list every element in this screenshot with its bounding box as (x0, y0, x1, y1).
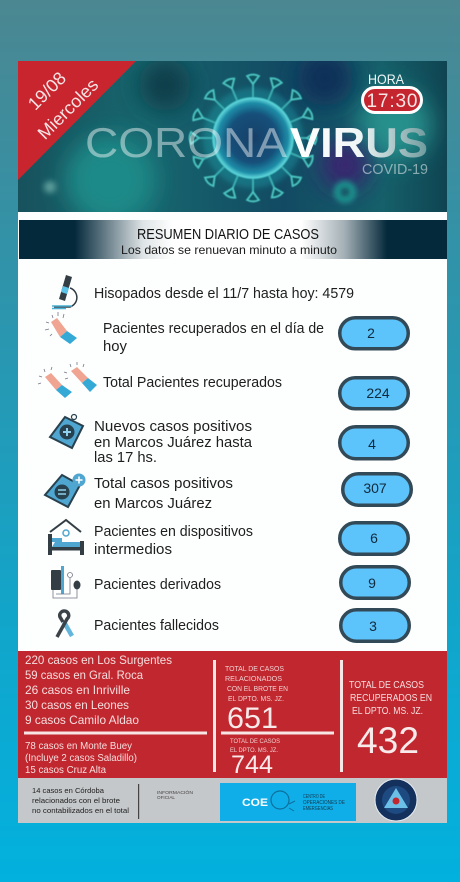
value pill: 307 (363, 480, 387, 496)
stat: total recuperados: RECUPERADOS EN (350, 693, 432, 704)
footnote: no contabilizados en el total (32, 806, 129, 815)
value pill: 224 (366, 385, 390, 401)
row: recuperados hoy (45, 312, 408, 355)
row: nuevos casos: Nuevos casos positivos (94, 419, 252, 435)
case list by town: 26 casos en Inriville (25, 683, 130, 697)
stat: total de casos: TOTAL DE CASOS (230, 738, 281, 745)
panel: grey footer (18, 778, 447, 823)
stat: casos relacionados con el brote: EL DPTO. MS. JZ. (228, 696, 284, 703)
date ribbon: 19/08 (24, 68, 70, 114)
heading band (19, 220, 447, 259)
value pill: 4 (368, 436, 376, 452)
icon: two clapping hands (38, 362, 97, 398)
value pill (340, 318, 408, 349)
logo: COE: COE (242, 797, 268, 809)
icon: mourning ribbon (57, 611, 72, 637)
value pill: 9 (368, 575, 376, 591)
panel: header banner (18, 61, 447, 212)
row: nuevos casos (50, 414, 408, 466)
stat: total recuperados: EL DPTO. MS. JZ. (352, 706, 423, 717)
title: VIRUS: VIRUS (290, 119, 428, 166)
stat: total recuperados (349, 680, 432, 761)
row: dispositivos intermedios: Pacientes en dispositivos (94, 524, 253, 540)
panel: red totals (18, 651, 447, 779)
panel: white card (18, 212, 447, 652)
case list by town (25, 653, 172, 727)
icon: clipboard minus plus (45, 474, 86, 507)
logo: COE (220, 783, 356, 821)
row: nuevos casos: las 17 hs. (94, 450, 157, 466)
official info label (157, 789, 193, 800)
official info label: INFORMACIÓN (157, 789, 193, 795)
logo: COE: EMERGENCIAS (303, 806, 334, 812)
row: total positivos: en Marcos Juárez (94, 496, 212, 512)
value pill (341, 567, 409, 598)
logo: COE: OPERACIONES DE (303, 800, 346, 806)
row: total positivos: Total casos positivos (94, 476, 233, 492)
value pill (340, 378, 408, 409)
stat: casos relacionados con el brote: TOTAL DE CASOS (225, 666, 284, 673)
footnote: relacionados con el brote (32, 796, 120, 805)
value pill: 3 (369, 618, 377, 634)
case list by town: 220 casos en Los Surgentes (25, 653, 172, 667)
stat: total de casos (230, 738, 281, 779)
row: total recuperados (38, 362, 408, 409)
icon: microscope (52, 275, 77, 308)
stat: casos relacionados con el brote: CON EL BROTE EN (227, 686, 288, 693)
value pill (343, 474, 411, 505)
row: nuevos casos: en Marcos Juárez hasta (94, 435, 253, 451)
icon: blood pressure monitor (51, 566, 80, 598)
value pill (340, 427, 408, 459)
secondary case list: 15 casos Cruz Alta (25, 765, 106, 776)
row: fallecidos: Pacientes fallecidos (94, 618, 219, 634)
date ribbon (18, 61, 136, 180)
heading band: RESUMEN DIARIO DE CASOS (137, 226, 319, 243)
stat: total recuperados: 432 (357, 720, 419, 761)
logo: defensa civil (375, 779, 417, 821)
row: recuperados hoy: hoy (103, 339, 128, 355)
row: dispositivos intermedios (48, 520, 408, 558)
stat: total recuperados: TOTAL DE CASOS (349, 680, 424, 691)
official info label: OFICIAL (157, 795, 175, 800)
secondary case list: (Incluye 2 casos Saladillo) (25, 753, 137, 764)
value pill (340, 523, 408, 554)
row: derivados: Pacientes derivados (94, 577, 221, 593)
time badge: 17:30 (366, 91, 418, 112)
time badge: HORA (368, 71, 405, 87)
icon: clipboard plus (50, 414, 83, 448)
stat: total de casos: EL DPTO. MS. JZ. (230, 747, 278, 754)
footnote: 14 casos en Córdoba (32, 786, 105, 795)
logo: COE: CENTRO DE (303, 794, 325, 800)
case list by town: 59 casos en Gral. Roca (25, 668, 143, 682)
row: fallecidos (57, 610, 409, 641)
row: hisopados: Hisopados desde el 11/7 hasta hoy: 4579 (94, 286, 354, 302)
footnote (32, 786, 129, 815)
row: recuperados hoy: Pacientes recuperados en el día de (103, 321, 324, 337)
row: total recuperados: Total Pacientes recuperados (103, 375, 282, 391)
title: CORONA: CORONA (85, 119, 287, 166)
secondary case list: 78 casos en Monte Buey (25, 741, 132, 752)
stat: casos relacionados con el brote: RELACIONADOS (225, 676, 282, 683)
row: derivados (51, 566, 409, 598)
icon: clapping hands (45, 312, 77, 344)
icon: coronavirus particle (190, 74, 316, 202)
case list by town: 9 casos Camilo Aldao (25, 713, 139, 727)
value pill: 2 (367, 325, 375, 341)
subtitle: COVID-19: COVID-19 (362, 161, 428, 178)
time badge (362, 71, 422, 112)
row: hisopados (52, 275, 354, 308)
row: total positivos (45, 474, 411, 512)
icon: house with bed (48, 520, 84, 555)
case list by town: 30 casos en Leones (25, 698, 129, 712)
value pill: 6 (370, 530, 378, 546)
stat: total de casos: 744 (231, 751, 273, 779)
row: dispositivos intermedios: intermedios (94, 542, 172, 558)
secondary case list (25, 741, 137, 776)
date ribbon: Miercoles (34, 75, 102, 143)
stat: casos relacionados con el brote (225, 666, 288, 735)
value pill (341, 610, 409, 641)
stat: casos relacionados con el brote: 651 (227, 702, 278, 735)
heading band: Los datos se renuevan minuto a minuto (121, 243, 337, 257)
